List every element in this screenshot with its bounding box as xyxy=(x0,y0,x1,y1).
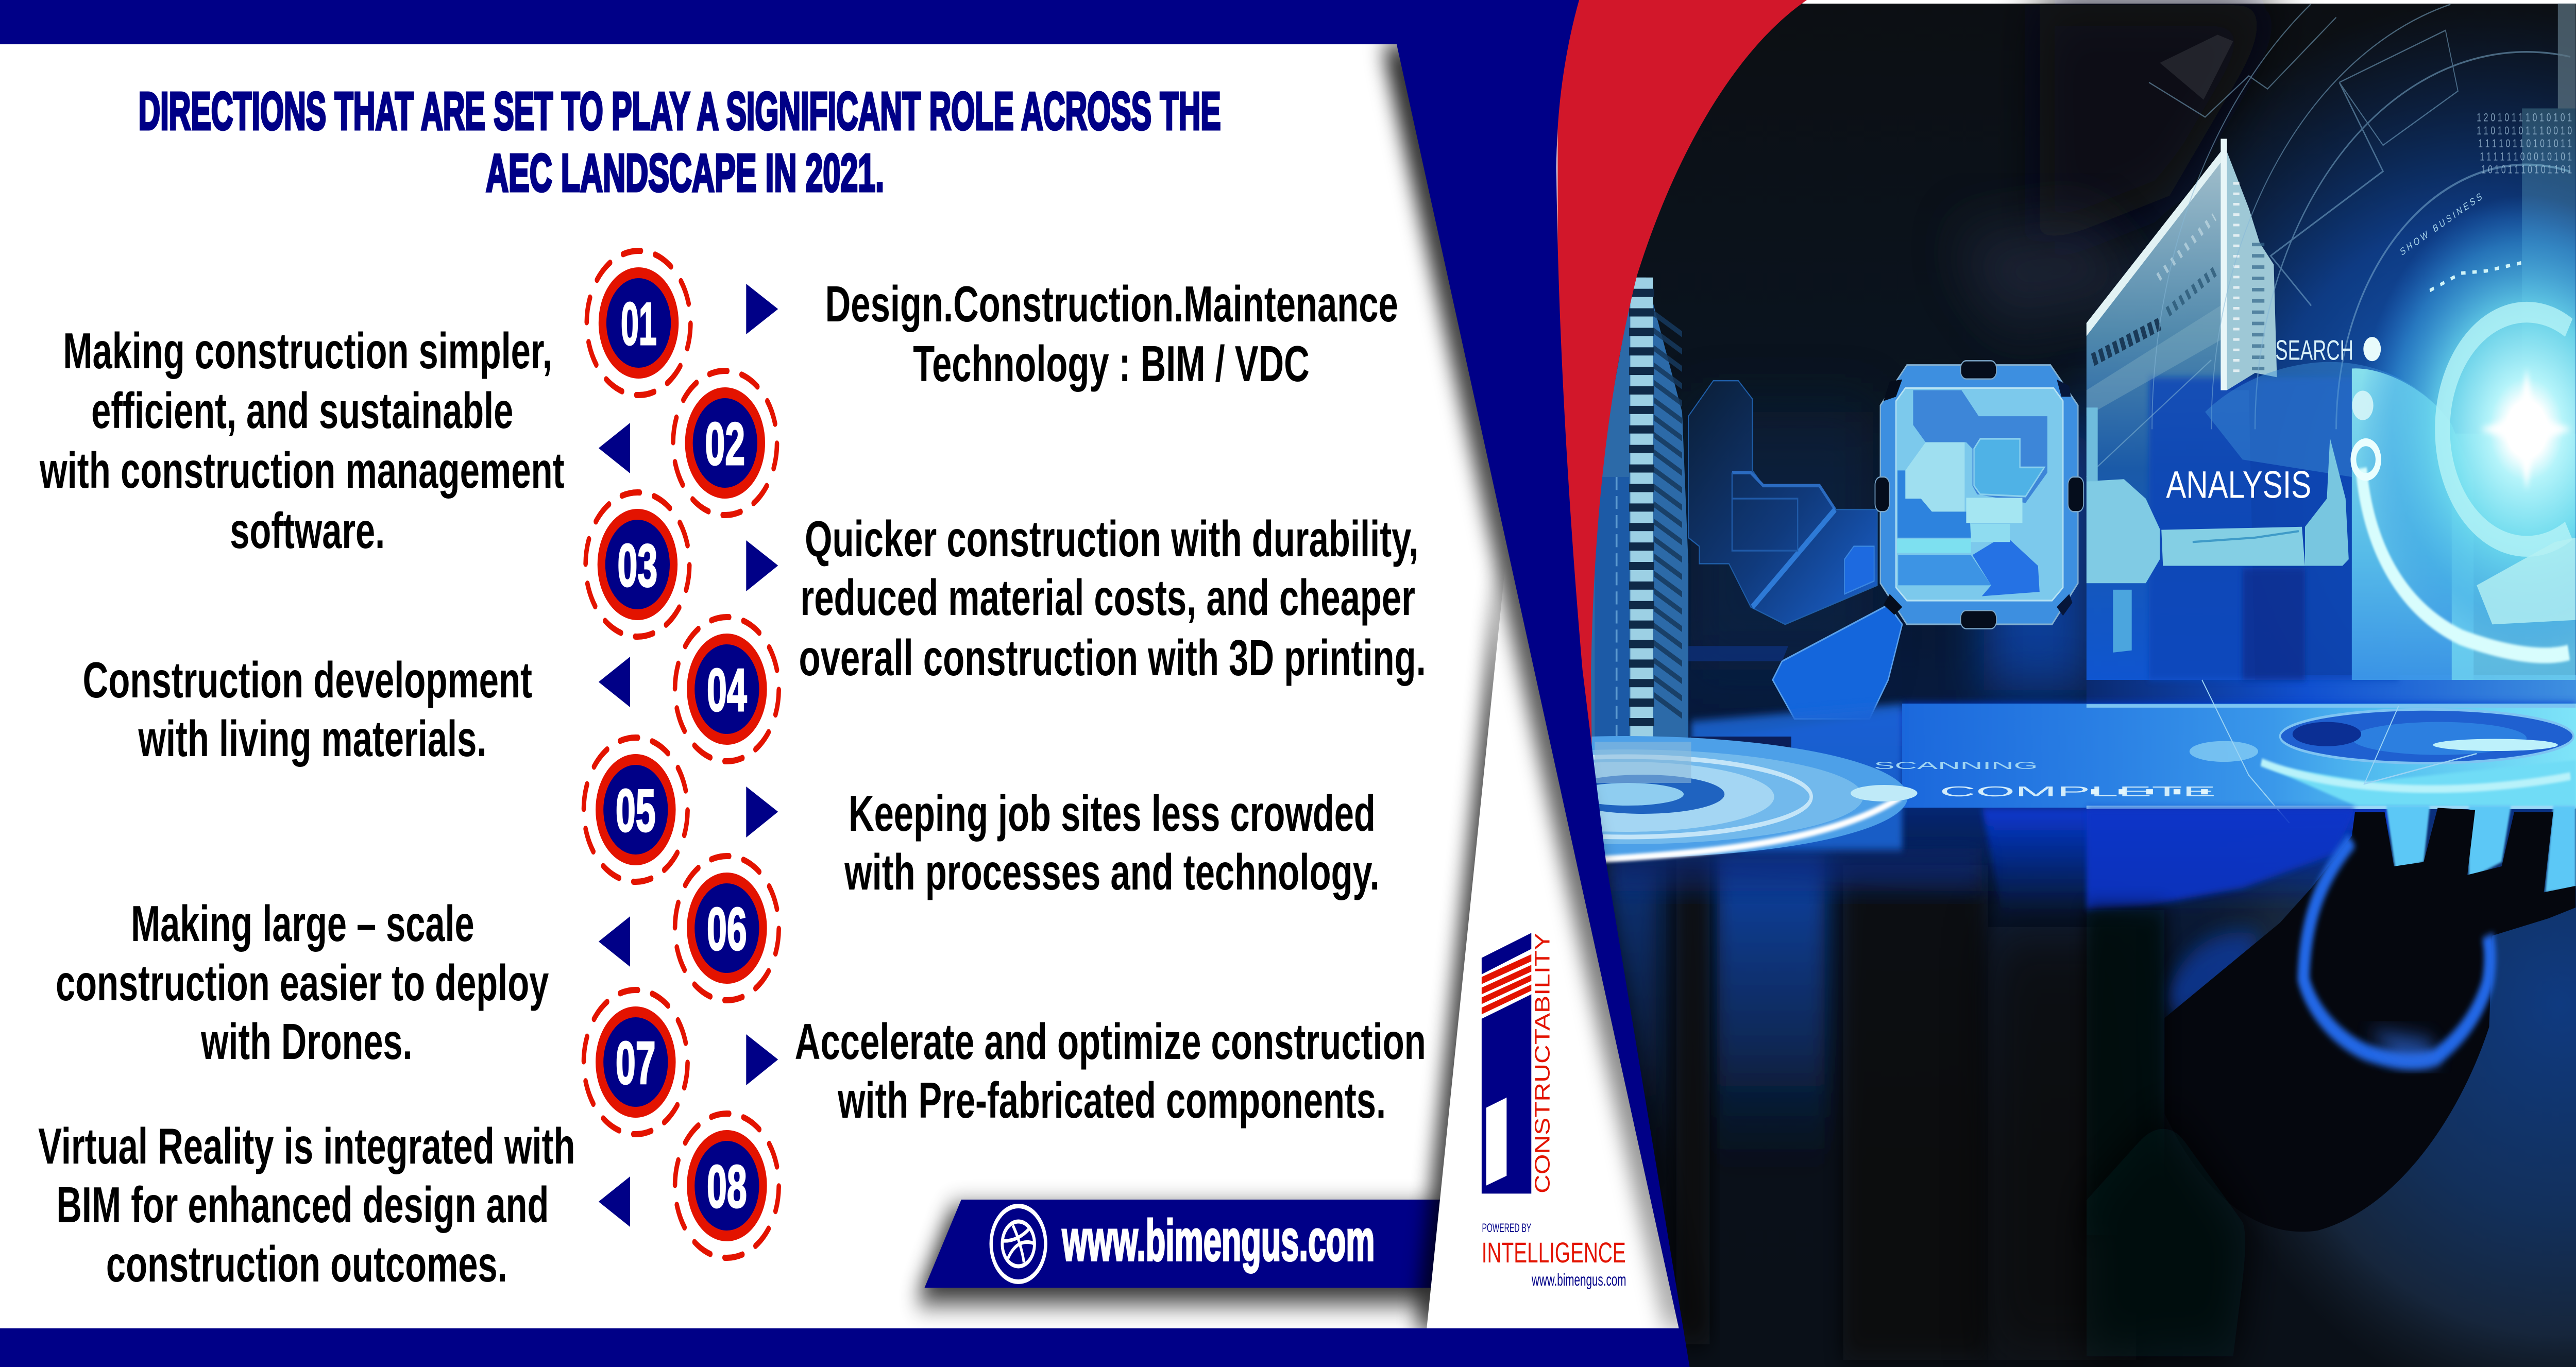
text block: 3D printing: reduced material costs, and cheaper xyxy=(800,570,1415,626)
text block: virtual reality: construction outcomes. xyxy=(106,1237,507,1293)
central hologram panel xyxy=(1875,361,2083,629)
glowing holographic tower and data rings xyxy=(2087,4,2575,680)
badge 06 xyxy=(662,838,792,1019)
text block: virtual reality: BIM for enhanced design and xyxy=(56,1177,549,1234)
binary data lines: 1 1 1 1 1 1 0 0 0 1 0 1 0 1 xyxy=(2480,151,2572,163)
text block: living materials xyxy=(83,653,532,767)
logo: Constructability building mark xyxy=(1482,933,1531,1193)
panel: logo triangle xyxy=(1415,547,1679,1331)
badge 06: 06 xyxy=(707,895,747,963)
text block: construction management software: Making construction simpler, xyxy=(63,323,552,380)
text block: living materials: Construction development xyxy=(83,653,532,709)
red swoosh xyxy=(1557,0,1807,752)
badge 08: 08 xyxy=(707,1153,747,1220)
label: search: SEARCH xyxy=(2275,335,2353,366)
text block: 3D printing: Quicker construction with durability, xyxy=(805,511,1418,568)
badge 08 xyxy=(662,1095,792,1276)
text block: pre-fabricated components: Accelerate and optimize construction xyxy=(795,1014,1426,1070)
text block: construction management software xyxy=(39,323,565,559)
badge 02 xyxy=(660,352,790,534)
badge 05 xyxy=(570,719,701,900)
text block: job sites xyxy=(844,786,1380,901)
text block: drones: construction easier to deploy xyxy=(56,955,549,1012)
binary data lines: 1 2 0 1 0 1 1 1 0 1 0 1 0 1 xyxy=(2477,112,2572,124)
title: AEC LANDSCAPE IN 2021. xyxy=(486,144,884,203)
arrow 06 xyxy=(599,916,630,967)
powered by: POWERED BY xyxy=(1482,1221,1531,1235)
table label: scanning: SCANNING xyxy=(1874,760,2038,772)
navy frame with diagonal band xyxy=(0,0,1690,1367)
text block: construction management software: efficient, and sustainable xyxy=(91,383,513,439)
badge 07 xyxy=(570,971,701,1153)
badge 01 xyxy=(573,232,704,414)
text block: 3D printing: overall construction with 3D printing. xyxy=(799,630,1426,687)
badge 03: 03 xyxy=(618,532,657,599)
badge 04: 04 xyxy=(707,656,747,724)
text block: job sites: with processes and technology. xyxy=(844,845,1380,901)
ring caption: SHOW BUSINESS xyxy=(2399,190,2483,258)
panel: white content area xyxy=(0,44,1520,1328)
intelligence wordmark: INTELLIGENCE xyxy=(1482,1237,1626,1269)
badge 01: 01 xyxy=(621,290,657,357)
table label: complete: COMPLETE xyxy=(1940,784,2216,800)
website address: www.bimengus.com xyxy=(1062,1208,1375,1273)
badge 04 xyxy=(662,599,792,780)
arrow 04 xyxy=(599,657,630,707)
text block: drones xyxy=(56,896,549,1070)
arrow 05 xyxy=(746,787,778,838)
glowing table surface xyxy=(1344,680,2576,917)
text block: BIM / VDC: Design.Construction.Maintenance xyxy=(825,277,1398,333)
dark blue circuit shape left of the panel xyxy=(1688,381,1902,719)
logo website: www.bimengus.com xyxy=(1531,1271,1626,1290)
label: analysis: ANALYSIS xyxy=(2166,464,2311,506)
text block: virtual reality xyxy=(38,1119,575,1293)
text block: construction management software: software. xyxy=(230,503,385,559)
text block: BIM / VDC xyxy=(825,277,1398,392)
badge 05: 05 xyxy=(616,777,656,844)
text block: BIM / VDC: Technology : BIM / VDC xyxy=(913,336,1310,392)
arrow 03 xyxy=(746,540,778,591)
text block: living materials: with living materials. xyxy=(138,711,486,767)
text block: virtual reality: Virtual Reality is integrated with xyxy=(38,1119,575,1175)
badge 02: 02 xyxy=(705,410,745,477)
left tower xyxy=(1588,278,1688,755)
title: DIRECTIONS THAT ARE SET TO PLAY A SIGNIFICANT ROLE ACROSS THE xyxy=(138,82,1221,141)
text block: drones: with Drones. xyxy=(200,1014,412,1070)
binary data lines: 1 1 0 1 0 1 0 1 1 1 0 0 1 0 xyxy=(2477,125,2572,138)
binary data lines: 1 1 1 1 0 1 1 0 1 0 1 0 1 1 xyxy=(2478,138,2572,150)
title xyxy=(138,82,1221,203)
text block: job sites: Keeping job sites less crowded xyxy=(849,786,1376,842)
text block: construction management software: with construction management xyxy=(39,443,565,499)
text block: drones: Making large – scale xyxy=(131,896,474,952)
text block: pre-fabricated components xyxy=(795,1014,1426,1129)
text block: 3D printing xyxy=(799,511,1426,687)
badge 07: 07 xyxy=(616,1029,656,1097)
arrow 08 xyxy=(599,1176,630,1227)
website banner xyxy=(916,1200,1446,1303)
arrow 02 xyxy=(599,423,630,473)
hand and sleeve silhouette xyxy=(2087,806,2575,1356)
text block: pre-fabricated components: with Pre-fabricated components. xyxy=(837,1073,1386,1129)
arrow 01 xyxy=(746,284,778,334)
logo wordmark: constructability: CONSTRUCTABILITY xyxy=(1531,933,1554,1193)
binary data lines: 1 0 1 0 1 1 1 0 1 0 1 1 0 1 xyxy=(2481,164,2572,176)
icon: dribbble ball xyxy=(991,1206,1046,1281)
badge 03 xyxy=(572,474,703,655)
binary data lines xyxy=(2477,112,2572,176)
arrow 07 xyxy=(746,1034,778,1085)
background photo: holographic city on a hand xyxy=(1344,0,2576,1367)
